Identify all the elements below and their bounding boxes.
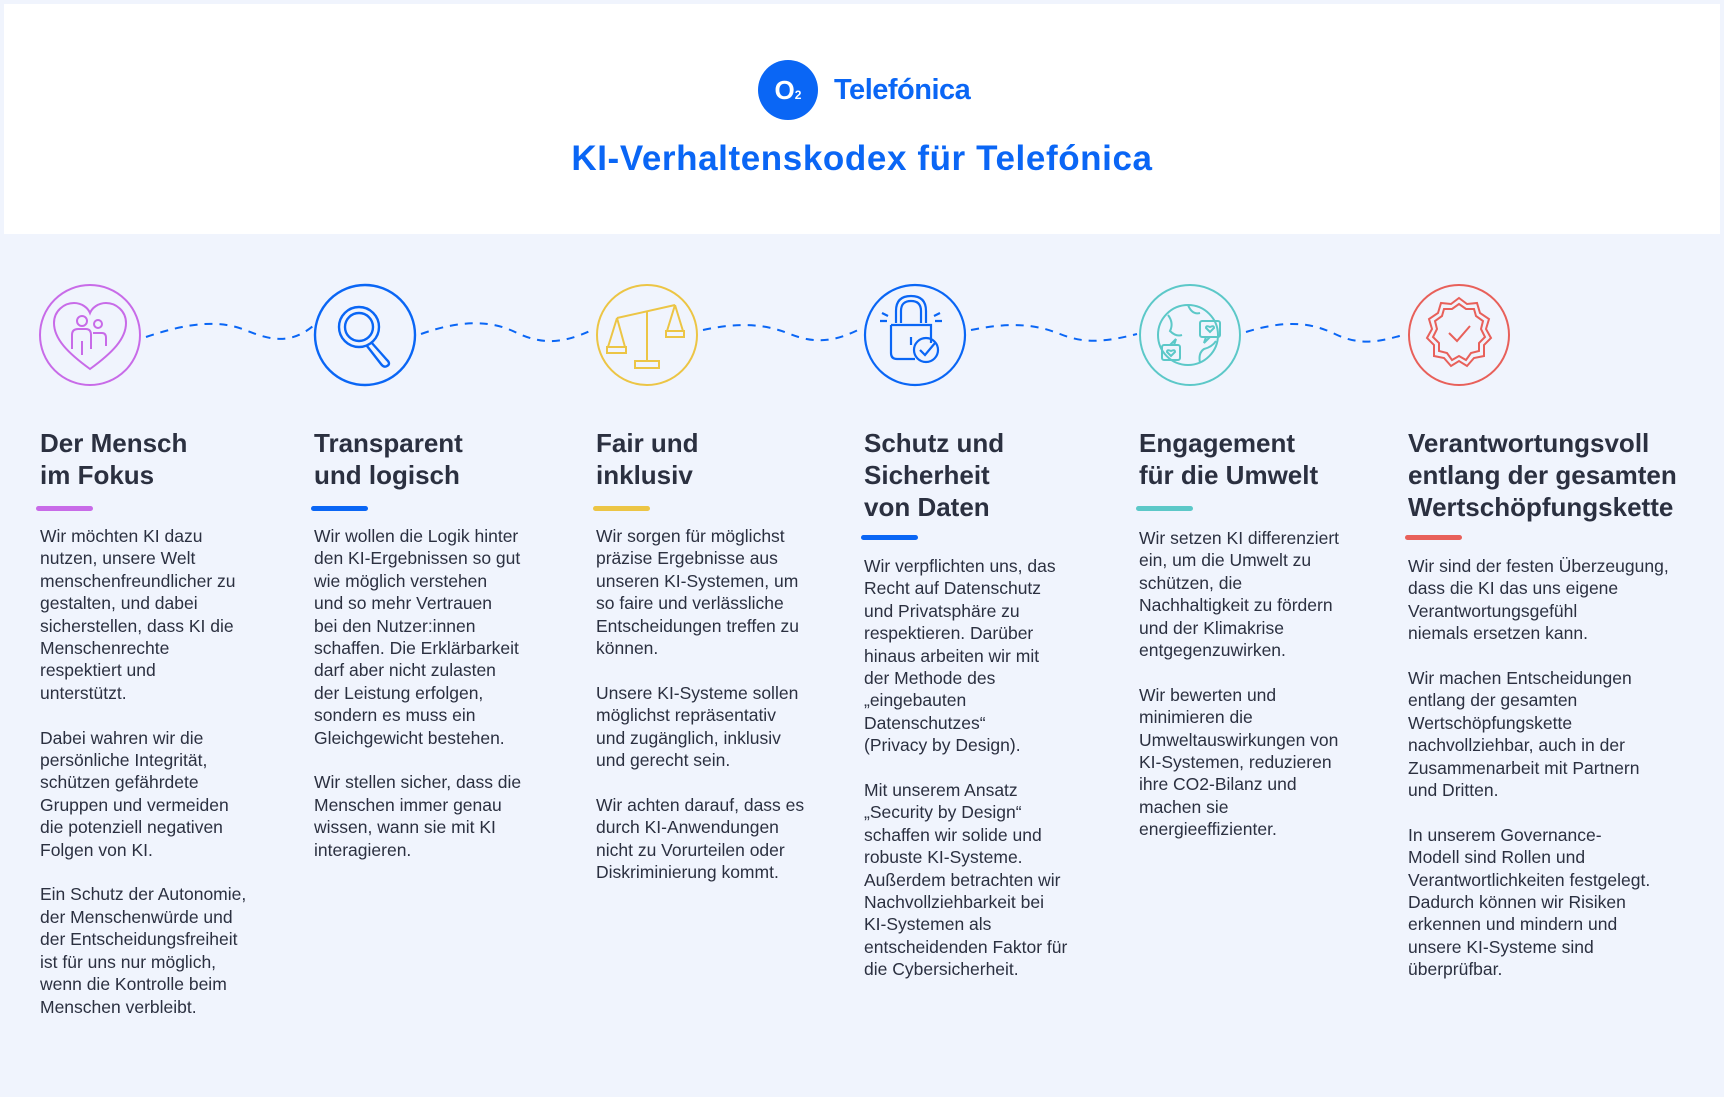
text 6: erkennen und mindern und (1408, 914, 1617, 934)
icon: scales (596, 284, 698, 386)
heading 6 (1408, 428, 1677, 522)
text 2: schaffen. Die Erklärbarkeit (314, 638, 519, 658)
heading 1 (40, 428, 187, 490)
text 1: gestalten, und dabei (40, 593, 198, 613)
text 2: bei den Nutzer:innen (314, 616, 476, 636)
heading 2: Transparent (314, 428, 463, 458)
text 5: Wir bewerten und (1139, 685, 1276, 705)
text 6: und Dritten. (1408, 780, 1498, 800)
text 4: Wir verpflichten uns, das (864, 556, 1056, 576)
text 4: (Privacy by Design). (864, 735, 1021, 755)
text 4 (864, 556, 1068, 979)
text 3: und zugänglich, inklusiv (596, 728, 781, 748)
text 1: sicherstellen, dass KI die (40, 616, 234, 636)
text 5: ein, um die Umwelt zu (1139, 550, 1311, 570)
text 5: machen sie (1139, 797, 1228, 817)
text 1: persönliche Integrität, (40, 750, 207, 770)
text 3: Entscheidungen treffen zu (596, 616, 799, 636)
text 3: so faire und verlässliche (596, 593, 784, 613)
text 1: der Menschenwürde und (40, 907, 233, 927)
text 3: präzise Ergebnisse aus (596, 548, 778, 568)
text 6: unsere KI-Systeme sind (1408, 937, 1594, 957)
text 5: Nachhaltigkeit zu fördern (1139, 595, 1333, 615)
heading 1: im Fokus (40, 460, 154, 490)
text 4: Außerdem betrachten wir (864, 870, 1060, 890)
text 1: nutzen, unsere Welt (40, 548, 195, 568)
heading 3: Fair und (596, 428, 699, 458)
text 4: Nachvollziehbarkeit bei (864, 892, 1044, 912)
column 2 (311, 428, 521, 860)
text 6: Wertschöpfungskette (1408, 713, 1572, 733)
text 5: Wir setzen KI differenziert (1139, 528, 1339, 548)
text 2: sondern es muss ein (314, 705, 475, 725)
heading 5: Engagement (1139, 428, 1295, 458)
text 4: Mit unserem Ansatz (864, 780, 1018, 800)
logo text: Telefónica (834, 74, 970, 106)
icon: magnifier (314, 284, 416, 386)
icon: heart with people (39, 284, 141, 386)
text 1: Ein Schutz der Autonomie, (40, 884, 246, 904)
text 1: respektiert und (40, 660, 156, 680)
text 5: und der Klimakrise (1139, 618, 1284, 638)
text 3: Diskriminierung kommt. (596, 862, 779, 882)
text 3: und gerecht sein. (596, 750, 730, 770)
text 2: der Leistung erfolgen, (314, 683, 483, 703)
text 4: Datenschutzes“ (864, 713, 986, 733)
text 1 (40, 526, 246, 1016)
heading 6: entlang der gesamten (1408, 460, 1677, 490)
text 6: Zusammenarbeit mit Partnern (1408, 758, 1639, 778)
heading 2: und logisch (314, 460, 460, 490)
title: KI-Verhaltenskodex für Telefónica (571, 139, 1153, 178)
text 1: menschenfreundlicher zu (40, 571, 236, 591)
text 4: Recht auf Datenschutz (864, 578, 1041, 598)
text 1: Menschenrechte (40, 638, 169, 658)
heading 4: Sicherheit (864, 460, 990, 490)
text 5 (1139, 528, 1339, 839)
text 6: Wir machen Entscheidungen (1408, 668, 1632, 688)
heading 5: für die Umwelt (1139, 460, 1318, 490)
heading 4: Schutz und (864, 428, 1004, 458)
text 6: In unserem Governance- (1408, 825, 1602, 845)
text 3: Wir achten darauf, dass es (596, 795, 804, 815)
text 4: respektieren. Darüber (864, 623, 1033, 643)
icon: badge check (1408, 284, 1510, 386)
text 4: entscheidenden Faktor für (864, 937, 1067, 957)
text 1: wenn die Kontrolle beim (40, 974, 227, 994)
text 2: und so mehr Vertrauen (314, 593, 492, 613)
text 4: die Cybersicherheit. (864, 959, 1019, 979)
heading 1: Der Mensch (40, 428, 187, 458)
text 1: Dabei wahren wir die (40, 728, 203, 748)
heading 3 (596, 428, 699, 490)
text 5: schützen, die (1139, 573, 1242, 593)
heading 6: Verantwortungsvoll (1408, 428, 1649, 458)
header panel (4, 4, 1720, 234)
text 4: „eingebauten (864, 690, 966, 710)
text 4: der Methode des (864, 668, 995, 688)
icon: O2 circle: O2 (775, 75, 801, 105)
text 3: unseren KI-Systemen, um (596, 571, 798, 591)
text 6: entlang der gesamten (1408, 690, 1577, 710)
text 2: interagieren. (314, 840, 411, 860)
text 1: Wir möchten KI dazu (40, 526, 202, 546)
text 6: Modell sind Rollen und (1408, 847, 1585, 867)
icon: globe with hearts (1139, 284, 1241, 386)
text 3: Unsere KI-Systeme sollen (596, 683, 798, 703)
text 5: entgegenzuwirken. (1139, 640, 1286, 660)
column 5 (1136, 428, 1339, 839)
text 1: unterstützt. (40, 683, 127, 703)
text 6: Verantwortlichkeiten festgelegt. (1408, 870, 1650, 890)
heading 4 (864, 428, 1004, 522)
text 2: darf aber nicht zulasten (314, 660, 496, 680)
text 3: Wir sorgen für möglichst (596, 526, 785, 546)
text 6: überprüfbar. (1408, 959, 1502, 979)
column 4 (861, 428, 1068, 979)
heading 2 (314, 428, 463, 490)
text 2: den KI-Ergebnissen so gut (314, 548, 520, 568)
text 5: ihre CO2-Bilanz und (1139, 774, 1297, 794)
text 1: ist für uns nur möglich, (40, 952, 216, 972)
text 4: robuste KI-Systeme. (864, 847, 1023, 867)
text 3: möglichst repräsentativ (596, 705, 776, 725)
text 3 (596, 526, 804, 882)
text 6: nachvollziehbar, auch in der (1408, 735, 1625, 755)
heading 4: von Daten (864, 492, 990, 522)
text 1: Menschen verbleibt. (40, 996, 197, 1016)
text 5: minimieren die (1139, 707, 1253, 727)
text 4: hinaus arbeiten wir mit (864, 646, 1039, 666)
text 2: Wir wollen die Logik hinter (314, 526, 518, 546)
text 1: Folgen von KI. (40, 840, 153, 860)
text 3: können. (596, 638, 658, 658)
text 3: nicht zu Vorurteilen oder (596, 840, 785, 860)
text 4: KI-Systemen als (864, 914, 991, 934)
text 6: Wir sind der festen Überzeugung, (1408, 556, 1669, 576)
text 3: durch KI-Anwendungen (596, 817, 779, 837)
text 1: der Entscheidungsfreiheit (40, 929, 237, 949)
text 4: schaffen wir solide und (864, 825, 1042, 845)
text 6: Verantwortungsgefühl (1408, 601, 1577, 621)
text 4: und Privatsphäre zu (864, 601, 1020, 621)
text 6: dass die KI das uns eigene (1408, 578, 1618, 598)
text 2: wissen, wann sie mit KI (314, 817, 496, 837)
icon: O2 circle (758, 60, 818, 120)
column 1 (36, 428, 246, 1016)
text 6 (1408, 556, 1669, 979)
text 5: energieeffizienter. (1139, 819, 1277, 839)
text 2: Menschen immer genau (314, 795, 502, 815)
text 2: Wir stellen sicher, dass die (314, 772, 521, 792)
text 6: niemals ersetzen kann. (1408, 623, 1588, 643)
column 6 (1405, 428, 1677, 979)
text 5: KI-Systemen, reduzieren (1139, 752, 1332, 772)
logo (758, 60, 971, 120)
text 1: Gruppen und vermeiden (40, 795, 229, 815)
icon: padlock (864, 284, 966, 386)
heading 5 (1139, 428, 1318, 490)
column 3 (593, 428, 804, 882)
text 1: die potenziell negativen (40, 817, 223, 837)
text 2: Gleichgewicht bestehen. (314, 728, 505, 748)
text 5: Umweltauswirkungen von (1139, 730, 1338, 750)
text 6: Dadurch können wir Risiken (1408, 892, 1626, 912)
text 4: „Security by Design“ (864, 802, 1022, 822)
text 2: wie möglich verstehen (314, 571, 487, 591)
text 2 (314, 526, 521, 860)
heading 3: inklusiv (596, 460, 693, 490)
text 1: schützen gefährdete (40, 772, 199, 792)
heading 6: Wertschöpfungskette (1408, 492, 1673, 522)
